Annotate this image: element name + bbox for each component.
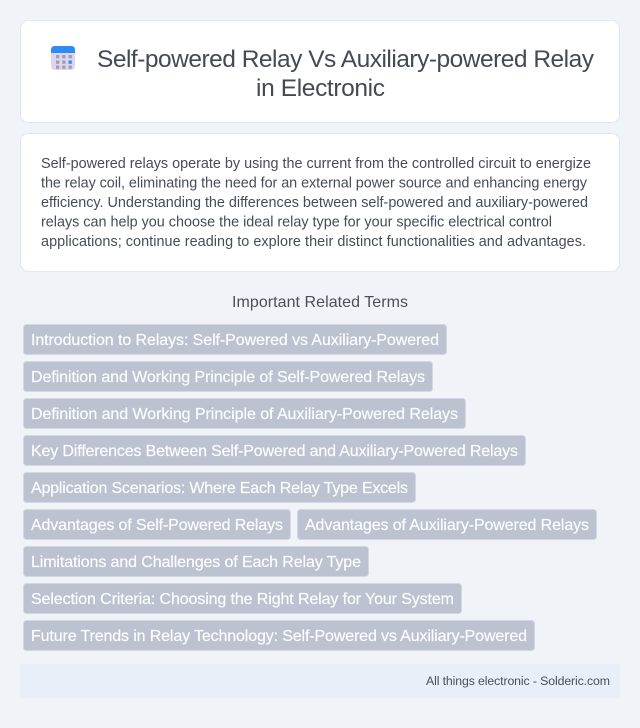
tag: advantages auxiliary-powered: Advantages of Auxiliary-Powered Relays [305, 517, 589, 534]
tag: introduction [24, 324, 446, 354]
title: Self-powered Relay Vs Auxiliary-powered Relay [97, 46, 595, 73]
intro paragraph: relays can help you choose the ideal relay type for your specific electrical control [41, 214, 552, 230]
title [97, 46, 595, 102]
tag: limitations [24, 546, 368, 576]
intro paragraph: Self-powered relays operate by using the current from the controlled circuit to energize [41, 156, 591, 172]
heading: important related terms: Important Related Terms [232, 294, 408, 311]
intro paragraph: efficiency. Understanding the differences between self-powered and auxiliary-powered [41, 195, 588, 211]
tag: self-powered definition [24, 362, 432, 392]
intro paragraph: applications; continue reading to explore their distinct functionalities and advantages. [41, 234, 586, 250]
tag: application scenarios [24, 472, 416, 502]
tag: application scenarios: Application Scenarios: Where Each Relay Type Excels [31, 480, 408, 497]
tag: advantages self-powered [24, 510, 290, 540]
intro paragraph [41, 156, 591, 250]
tag: selection criteria: Selection Criteria: Choosing the Right Relay for Your System [31, 591, 454, 608]
tag: key differences [24, 436, 526, 466]
footer [20, 664, 620, 698]
tag: auxiliary-powered definition [24, 398, 466, 428]
tag: introduction: Introduction to Relays: Self-Powered vs Auxiliary-Powered [31, 332, 439, 349]
term tags [24, 324, 596, 650]
tag: future trends: Future Trends in Relay Technology: Self-Powered vs Auxiliary-Powered [31, 628, 527, 645]
intro text panel [20, 134, 620, 272]
header panel [20, 20, 620, 122]
tag: auxiliary-powered definition: Definition and Working Principle of Auxiliary-Powered Relays [31, 406, 458, 423]
intro paragraph: the relay coil, eliminating the need for an external power source and enhancing energy [41, 176, 588, 192]
tag: limitations: Limitations and Challenges of Each Relay Type [31, 554, 361, 571]
footer: All things electronic - Solderic.com [426, 674, 610, 688]
tag: self-powered definition: Definition and Working Principle of Self-Powered Relays [31, 369, 425, 386]
tag: advantages auxiliary-powered [298, 510, 596, 540]
tag: selection criteria [24, 584, 462, 614]
icon: calendar grid [51, 46, 75, 70]
title: in Electronic [256, 75, 385, 102]
tag: key differences: Key Differences Between Self-Powered and Auxiliary-Powered Relays [31, 443, 518, 460]
tag: advantages self-powered: Advantages of Self-Powered Relays [31, 517, 283, 534]
tag: future trends [24, 620, 534, 650]
